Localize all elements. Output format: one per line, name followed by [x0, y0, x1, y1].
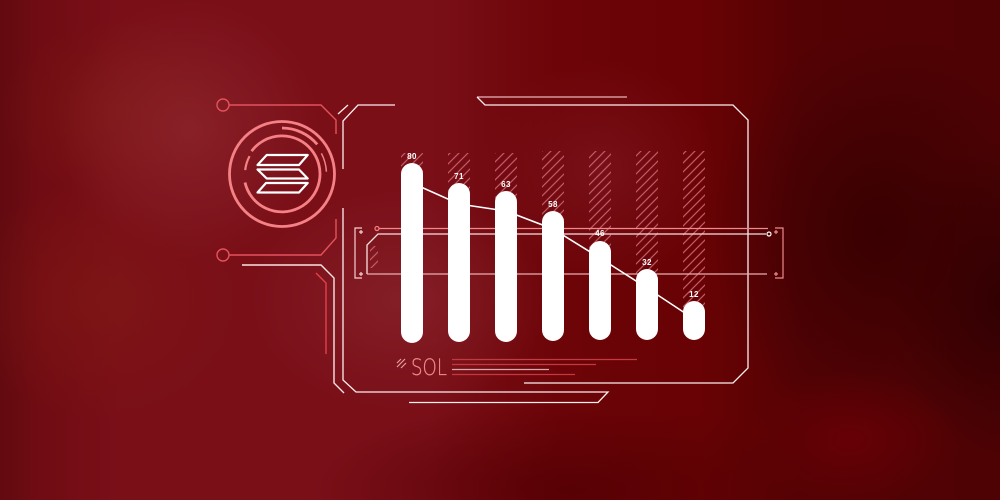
- bar chart: [401, 163, 705, 343]
- legend lines: [452, 360, 637, 374]
- bar value labels: 80: [407, 152, 417, 161]
- bar value labels: 71: [454, 172, 464, 181]
- chart frame: [338, 97, 748, 402]
- bar: 58: [542, 211, 564, 341]
- bar: 63: [495, 191, 517, 342]
- small hatch icon: SOL: [397, 359, 406, 368]
- bar: 71: [448, 183, 470, 342]
- small hatch: band corner: [370, 246, 378, 268]
- trend line: [412, 183, 694, 319]
- bar: 12: [683, 301, 705, 340]
- bar value labels: 32: [642, 258, 652, 267]
- label: SOL: SOL: [411, 356, 447, 381]
- icon: Solana coin badge: [230, 122, 334, 226]
- bar value labels: 63: [501, 180, 511, 189]
- bar value labels: 46: [595, 229, 605, 238]
- horizontal band lines: [367, 226, 771, 274]
- bar: 46: [589, 241, 611, 340]
- bar value labels: [407, 152, 699, 299]
- icon: Solana logo: [258, 155, 308, 192]
- hatch columns behind bars: [401, 151, 705, 311]
- white circuit line: lower left: [242, 265, 344, 393]
- red circuit line: lower left inner: [316, 273, 326, 354]
- bracket: left: [355, 228, 363, 278]
- bracket: right: [774, 228, 783, 278]
- bar: 32: [636, 269, 658, 340]
- bar value labels: 12: [689, 290, 699, 299]
- bar: 80: [401, 163, 423, 343]
- red circuit line: top: [217, 99, 336, 134]
- bar value labels: 58: [548, 200, 558, 209]
- red circuit line: bottom: [217, 219, 336, 261]
